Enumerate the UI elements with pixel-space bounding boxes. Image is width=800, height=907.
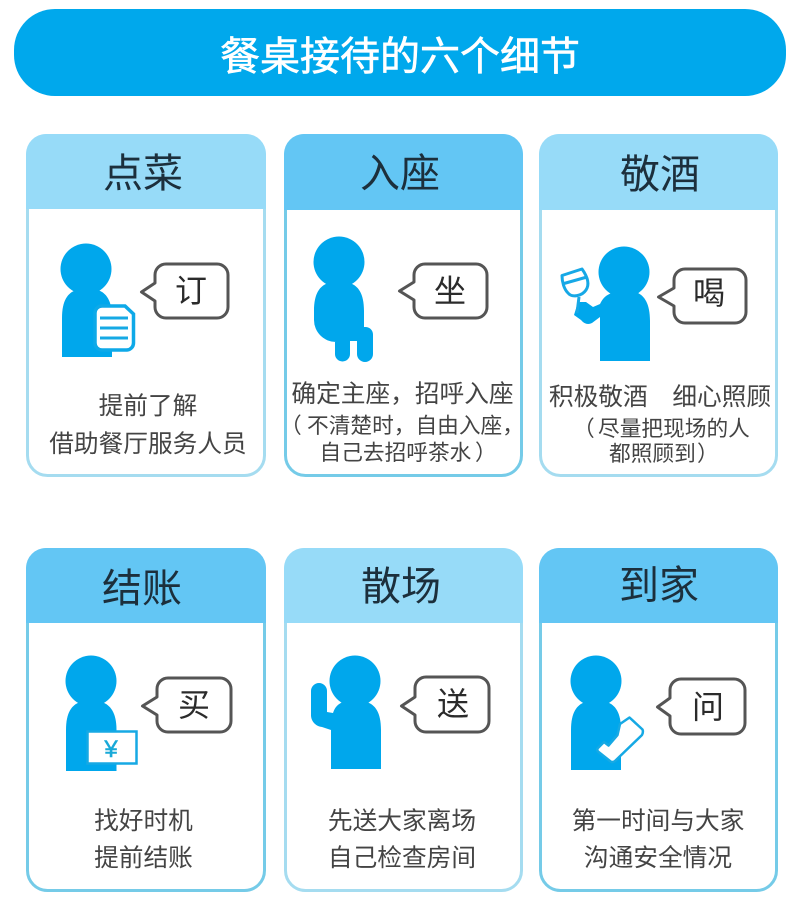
description: ） [697, 441, 719, 466]
description: 先送大家离场 [328, 807, 476, 835]
icon: seated person [314, 236, 373, 362]
title banner [14, 9, 786, 96]
description [280, 380, 524, 465]
speech bubble: 喝 [658, 269, 746, 323]
panel: 敬酒 [539, 134, 778, 476]
description: 沟通安全情况 [584, 844, 732, 872]
heading: 点菜: 点菜 [103, 152, 183, 196]
speech bubble: 订 [142, 264, 228, 318]
description [94, 807, 193, 872]
description: （ [573, 416, 595, 441]
description: 借助餐厅服务人员 [49, 430, 247, 458]
description: 确定主座，招呼入座 [291, 380, 514, 408]
icon: person with money card: ¥ [103, 736, 118, 763]
description [328, 807, 476, 872]
description [49, 392, 247, 458]
speech bubble: 买: 买 [178, 687, 210, 723]
speech bubble: 买 [142, 678, 231, 732]
icon: person with money card [66, 656, 136, 771]
description: 自己去招呼茶水 [320, 440, 472, 465]
speech bubble: 问: 问 [692, 689, 724, 725]
speech bubble: 喝: 喝 [693, 275, 725, 311]
heading: 到家: 到家 [619, 564, 699, 608]
icon: person with document [60, 244, 134, 357]
speech bubble: 问 [658, 679, 745, 734]
speech bubble: 送 [402, 677, 489, 732]
speech bubble: 坐 [400, 264, 487, 318]
description: ） [475, 440, 497, 465]
panel: 点菜 [26, 134, 266, 476]
heading: 敬酒: 敬酒 [620, 153, 700, 197]
description: 自己检查房间 [328, 844, 476, 872]
icon: person waving [311, 656, 381, 769]
speech bubble: 订: 订 [175, 273, 207, 309]
description: 都照顾到 [609, 441, 696, 466]
panel: 入座 [280, 134, 524, 476]
description: 积极敬酒 细心照顾 [549, 383, 771, 411]
panel: 散场 [284, 548, 523, 890]
description: 找好时机 [94, 807, 193, 835]
description [572, 807, 744, 872]
description: 提前结账 [94, 844, 193, 872]
description: （ [280, 413, 302, 438]
panel: 到家 [539, 548, 778, 890]
speech bubble: 坐: 坐 [434, 273, 466, 309]
icon: person raising glass [562, 246, 650, 361]
description: 尽量把现场的人 [598, 416, 750, 441]
panel: 结账 [26, 548, 266, 890]
description: 第一时间与大家 [572, 807, 744, 835]
description [549, 383, 771, 466]
title banner: 餐桌接待的六个细节 [220, 35, 580, 79]
heading: 入座: 入座 [360, 152, 440, 196]
heading: 散场: 散场 [361, 565, 441, 609]
icon: person with phone [570, 656, 643, 770]
description: 提前了解 [99, 392, 197, 420]
description: 不清楚时，自由入座， [307, 413, 524, 438]
speech bubble: 送: 送 [437, 686, 469, 722]
heading: 结账: 结账 [102, 567, 182, 611]
